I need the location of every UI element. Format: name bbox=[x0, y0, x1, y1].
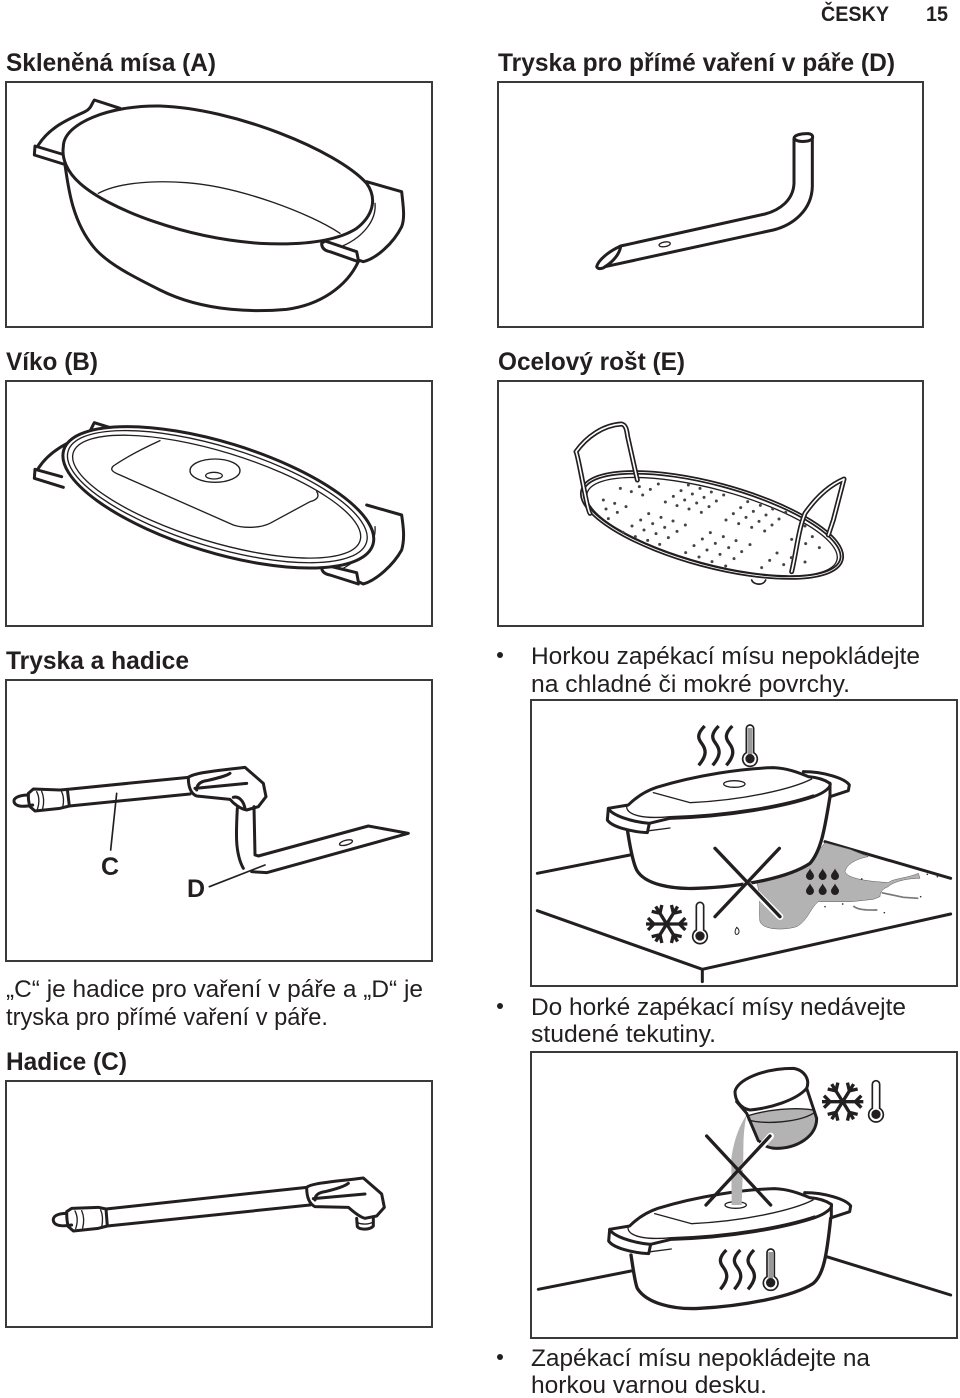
leader line C bbox=[111, 793, 117, 850]
leader line D bbox=[209, 865, 265, 887]
panel: steam nozzle bbox=[498, 82, 923, 327]
icon: heat bbox=[720, 1250, 754, 1289]
heading: lid: Víko (B) bbox=[6, 348, 98, 376]
icon: water drops bbox=[806, 868, 839, 895]
bullet text: place on hot hob: Zapékací mísu nepokládejte na bbox=[531, 1345, 870, 1372]
heading: steel rack: Ocelový rošt (E) bbox=[498, 348, 685, 376]
icon: cold thermometer bbox=[869, 1081, 883, 1122]
panel: hose bbox=[6, 1081, 432, 1327]
heading: glass bowl: Skleněná mísa (A) bbox=[6, 49, 216, 77]
page header: 15 bbox=[926, 3, 948, 26]
bullet text: no cold liquids bbox=[497, 994, 906, 1048]
page header: ČESKY bbox=[821, 2, 889, 26]
panel: lid bbox=[6, 381, 432, 626]
icon: hot thermometer bbox=[763, 1249, 778, 1290]
water stream bbox=[731, 1115, 747, 1205]
bullet text: no cold liquids: Do horké zapékací mísy nedávejte bbox=[531, 994, 906, 1021]
spilled water bbox=[757, 843, 920, 929]
icon: cold thermometer bbox=[693, 902, 707, 944]
heading: hose: Hadice (C) bbox=[6, 1048, 127, 1076]
page header bbox=[821, 2, 948, 26]
icon: hot thermometer bbox=[743, 725, 757, 766]
cross bbox=[715, 848, 780, 917]
bullet text: hot dish on cold surfaces: na chladné či mokré povrchy. bbox=[531, 671, 850, 698]
panel: glass bowl bbox=[6, 82, 432, 327]
dish bbox=[631, 1218, 831, 1309]
panel: steel rack bbox=[498, 381, 923, 626]
icon: snowflake bbox=[646, 903, 687, 945]
bullet text: no cold liquids: studené tekutiny. bbox=[531, 1021, 716, 1048]
icon: heat bbox=[699, 726, 733, 765]
label C: C bbox=[101, 853, 119, 881]
dish bbox=[628, 797, 830, 888]
jug bbox=[735, 1068, 817, 1148]
heading: nozzle and hose: Tryska a hadice bbox=[6, 647, 189, 675]
panel: hot dish on wet surface warning bbox=[531, 700, 957, 986]
panel: cold liquid warning bbox=[531, 1052, 957, 1338]
text: nozzle explanation: tryska pro přímé vaření v páře. bbox=[6, 1004, 328, 1031]
text: nozzle explanation: „C“ je hadice pro vaření v páře a „D“ je bbox=[6, 976, 423, 1003]
heading: steam nozzle: Tryska pro přímé vaření v páře (D) bbox=[498, 49, 895, 77]
bullet text: hot dish on cold surfaces: Horkou zapékací mísu nepokládejte bbox=[531, 643, 920, 670]
text: nozzle explanation bbox=[6, 976, 423, 1031]
cross bbox=[706, 1136, 771, 1205]
icon: snowflake bbox=[822, 1081, 863, 1122]
label D: D bbox=[187, 875, 205, 903]
bullet text: place on hot hob bbox=[497, 1345, 870, 1398]
bullet text: hot dish on cold surfaces bbox=[497, 643, 920, 698]
panel: nozzle and hose bbox=[6, 680, 432, 961]
